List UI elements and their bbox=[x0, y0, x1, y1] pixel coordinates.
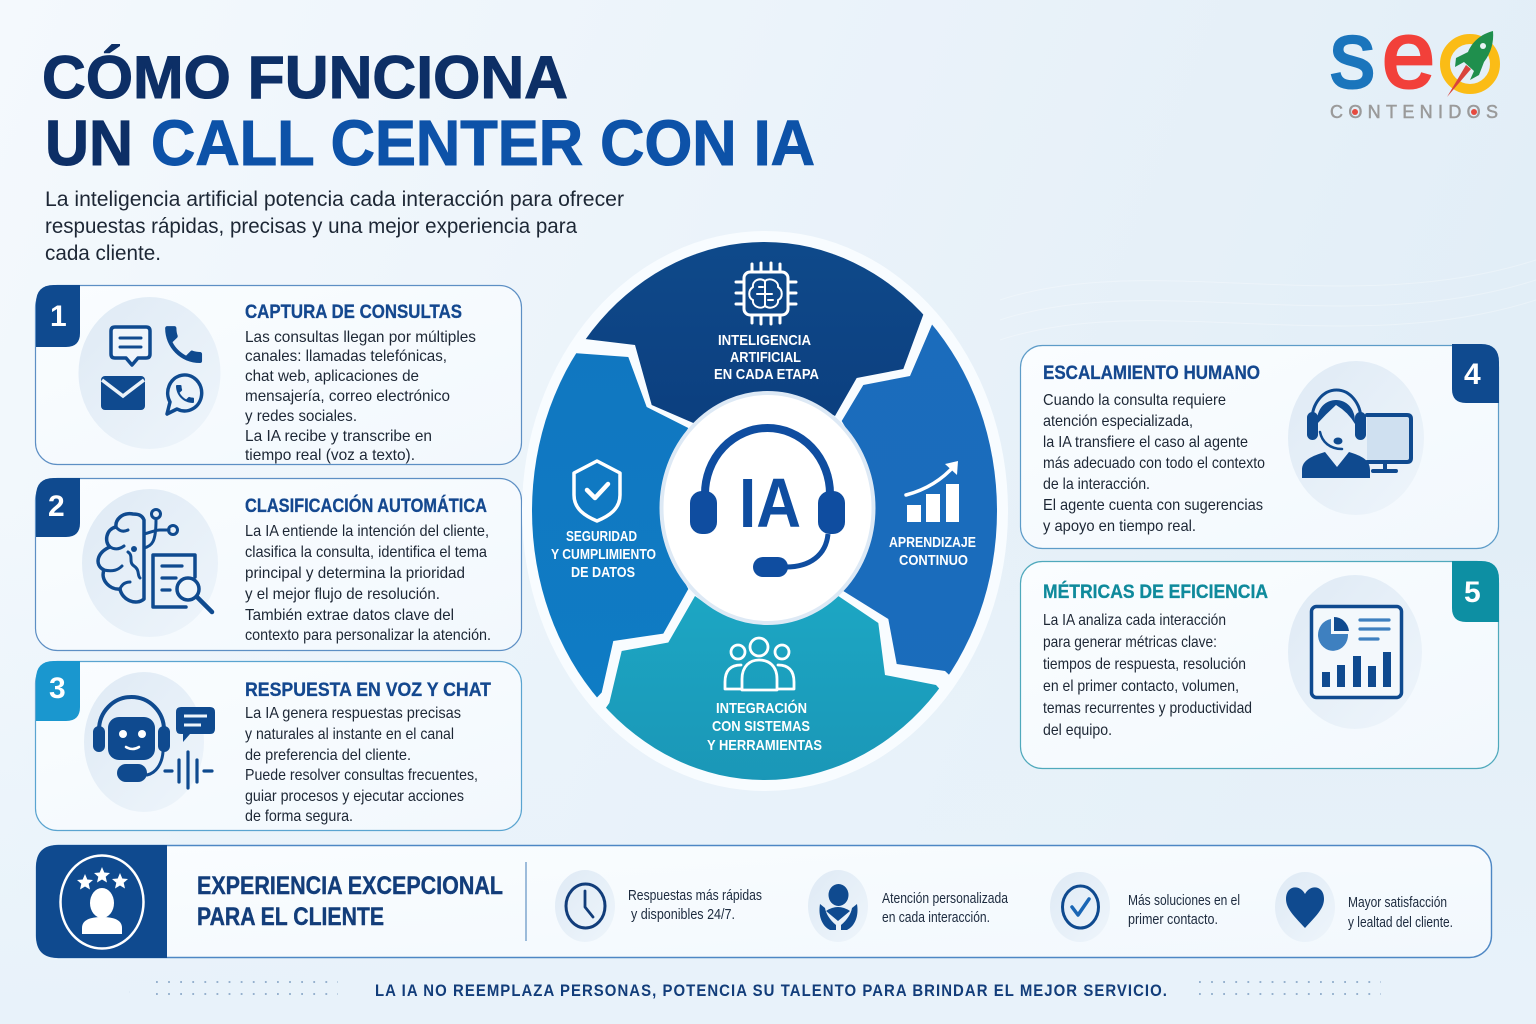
logo: SEO Contenidos bbox=[1330, 2, 1498, 122]
text block 5: para generar métricas clave: bbox=[1043, 634, 1217, 651]
badge 2 bbox=[36, 478, 80, 537]
icon: robot con auriculares bbox=[84, 672, 215, 812]
text block 4: de la interacción. bbox=[1043, 476, 1150, 493]
text block 2: y el mejor flujo de resolución. bbox=[245, 586, 440, 603]
text block 5: del equipo. bbox=[1043, 722, 1112, 739]
icon: chip con cerebro bbox=[736, 263, 796, 324]
heading: EXPERIENCIA EXCEPCIONAL bbox=[197, 872, 503, 900]
text block 4 bbox=[1043, 392, 1265, 535]
badge 3 bbox=[36, 661, 80, 721]
benefit: atención personalizada bbox=[808, 870, 1009, 942]
label: Y CUMPLIMIENTO bbox=[551, 546, 656, 563]
benefit: atención personalizada: Atención personalizada bbox=[882, 890, 1009, 907]
heading 2: CLASIFICACIÓN AUTOMÁTICA bbox=[245, 495, 487, 517]
text block 1: chat web, aplicaciones de bbox=[245, 368, 419, 385]
label bbox=[714, 332, 819, 383]
text block 4: la IA transfiere el caso al agente bbox=[1043, 434, 1248, 451]
benefit: respuestas rápidas: y disponibles 24/7. bbox=[631, 906, 735, 923]
title: UN bbox=[45, 107, 133, 179]
text block 1: tiempo real (voz a texto). bbox=[245, 447, 415, 464]
heading bbox=[197, 872, 503, 931]
central wheel bbox=[522, 231, 1008, 791]
panel 3: respuesta en voz y chat bbox=[36, 661, 522, 830]
badge 4 bbox=[1452, 344, 1499, 403]
benefit: mayor satisfacción bbox=[1275, 872, 1453, 942]
icon: gráfico creciente bbox=[906, 461, 959, 522]
icon: agente humano bbox=[1288, 361, 1424, 515]
footer tagline: LA IA NO REEMPLAZA PERSONAS, POTENCIA SU TALENTO PARA BRINDAR EL MEJOR SERVICIO. bbox=[375, 981, 1168, 1000]
segment: seguridad bbox=[532, 353, 688, 698]
title: CÓMO FUNCIONA bbox=[42, 44, 568, 111]
segment: inteligencia artificial bbox=[586, 242, 924, 423]
panel 1: captura de consultas bbox=[36, 285, 522, 464]
text block 4: atención especializada, bbox=[1043, 413, 1193, 430]
logo: SEO Contenidos: e bbox=[1382, 2, 1435, 108]
text block 1: mensajería, correo electrónico bbox=[245, 388, 450, 405]
text block 4: y apoyo en tiempo real. bbox=[1043, 518, 1196, 535]
logo: SEO Contenidos: s bbox=[1330, 2, 1375, 108]
heading 1: CAPTURA DE CONSULTAS bbox=[245, 302, 462, 323]
text block 3: y naturales al instante en el canal bbox=[245, 726, 454, 743]
text block 3: La IA genera respuestas precisas bbox=[245, 705, 461, 722]
text block 1: Las consultas llegan por múltiples bbox=[245, 329, 476, 346]
text block 5: temas recurrentes y productividad bbox=[1043, 700, 1252, 717]
subtitle: respuestas rápidas, precisas y una mejor experiencia para bbox=[45, 215, 577, 238]
center hub: IA headset: IA bbox=[739, 464, 801, 542]
badge 1: 1 bbox=[50, 300, 67, 333]
heading 4: ESCALAMIENTO HUMANO bbox=[1043, 363, 1260, 384]
label bbox=[551, 528, 656, 581]
label: ARTIFICIAL bbox=[730, 349, 801, 366]
text block 2: principal y determina la prioridad bbox=[245, 565, 465, 582]
text block 2: También extrae datos clave del bbox=[245, 607, 454, 624]
panel 5: métricas de eficiencia bbox=[1020, 561, 1499, 768]
panel 2: clasificación automática bbox=[36, 478, 522, 650]
label: DE DATOS bbox=[571, 564, 635, 581]
logo: SEO Contenidos: CONTENIDOS bbox=[1330, 102, 1498, 122]
benefit: más soluciones: primer contacto. bbox=[1128, 911, 1218, 928]
text block 4: Cuando la consulta requiere bbox=[1043, 392, 1226, 409]
benefit: mayor satisfacción: y lealtad del cliente. bbox=[1348, 914, 1453, 931]
label: Y HERRAMIENTAS bbox=[707, 737, 822, 754]
label: EN CADA ETAPA bbox=[714, 366, 819, 383]
heading 3: RESPUESTA EN VOZ Y CHAT bbox=[245, 680, 491, 701]
text block 3: Puede resolver consultas frecuentes, bbox=[245, 767, 478, 784]
text block 4: más adecuado con todo el contexto bbox=[1043, 455, 1265, 472]
badge 4: 4 bbox=[1464, 358, 1481, 391]
title: CALL CENTER CON IA bbox=[151, 107, 815, 179]
label: SEGURIDAD bbox=[566, 528, 637, 545]
text block 5 bbox=[1043, 612, 1252, 739]
text block 5: La IA analiza cada interacción bbox=[1043, 612, 1226, 629]
benefit: respuestas rápidas bbox=[555, 870, 762, 942]
label: CONTINUO bbox=[899, 552, 968, 569]
wheel white ring bbox=[522, 231, 1008, 791]
benefit: más soluciones: Más soluciones en el bbox=[1128, 892, 1240, 909]
label: APRENDIZAJE bbox=[889, 534, 976, 551]
text block 5: en el primer contacto, volumen, bbox=[1043, 678, 1239, 695]
text block 1: y redes sociales. bbox=[245, 408, 357, 425]
subtitle: cada cliente. bbox=[45, 242, 161, 265]
subtitle bbox=[45, 188, 624, 265]
icon: escudo bbox=[574, 461, 620, 521]
text block 4: El agente cuenta con sugerencias bbox=[1043, 497, 1263, 514]
heading 5: MÉTRICAS DE EFICIENCIA bbox=[1043, 581, 1268, 603]
label: INTELIGENCIA bbox=[718, 332, 811, 349]
badge 1 bbox=[36, 285, 80, 347]
icon: canales de comunicación bbox=[78, 297, 220, 449]
panel 4: escalamiento humano bbox=[1020, 344, 1499, 548]
badge 5: 5 bbox=[1464, 576, 1481, 609]
title bbox=[42, 44, 815, 179]
benefit: mayor satisfacción: Mayor satisfacción bbox=[1348, 894, 1447, 911]
heading: PARA EL CLIENTE bbox=[197, 903, 384, 931]
badge 2: 2 bbox=[48, 490, 65, 523]
benefit: respuestas rápidas: Respuestas más rápidas bbox=[628, 887, 762, 904]
label bbox=[889, 534, 976, 569]
panel: experiencia excepcional bbox=[36, 845, 1492, 958]
icon: cerebro y documento bbox=[82, 489, 218, 637]
badge 5 bbox=[1452, 561, 1499, 622]
label bbox=[707, 699, 822, 754]
text block 3: guiar procesos y ejecutar acciones bbox=[245, 788, 464, 805]
segment: integración con sistemas bbox=[606, 596, 939, 780]
badge 3: 3 bbox=[49, 672, 66, 705]
text block 1: canales: llamadas telefónicas, bbox=[245, 348, 447, 365]
label: INTEGRACIÓN bbox=[716, 699, 807, 717]
label: CON SISTEMAS bbox=[712, 718, 810, 735]
text block 1: La IA recibe y transcribe en bbox=[245, 428, 432, 445]
subtitle: La inteligencia artificial potencia cada interacción para ofrecer bbox=[45, 188, 624, 211]
text block 5: tiempos de respuesta, resolución bbox=[1043, 656, 1246, 673]
text block 3: de preferencia del cliente. bbox=[245, 747, 411, 764]
text block 2: clasifica la consulta, identifica el tema bbox=[245, 544, 487, 561]
icon: panel de métricas bbox=[1288, 575, 1422, 729]
text block 2: contexto para personalizar la atención. bbox=[245, 627, 491, 644]
text block 3 bbox=[245, 705, 478, 825]
text block 3: de forma segura. bbox=[245, 808, 353, 825]
segment: aprendizaje continuo bbox=[842, 324, 997, 675]
center hub: IA headset bbox=[662, 393, 874, 623]
text block 2 bbox=[245, 523, 491, 644]
icon block: cliente con estrellas bbox=[36, 845, 167, 958]
text block 1 bbox=[245, 329, 476, 464]
benefit: atención personalizada: en cada interacción. bbox=[882, 909, 990, 926]
icon: grupo de personas bbox=[725, 638, 794, 690]
benefit: más soluciones bbox=[1050, 872, 1240, 942]
text block 2: La IA entiende la intención del cliente, bbox=[245, 523, 489, 540]
